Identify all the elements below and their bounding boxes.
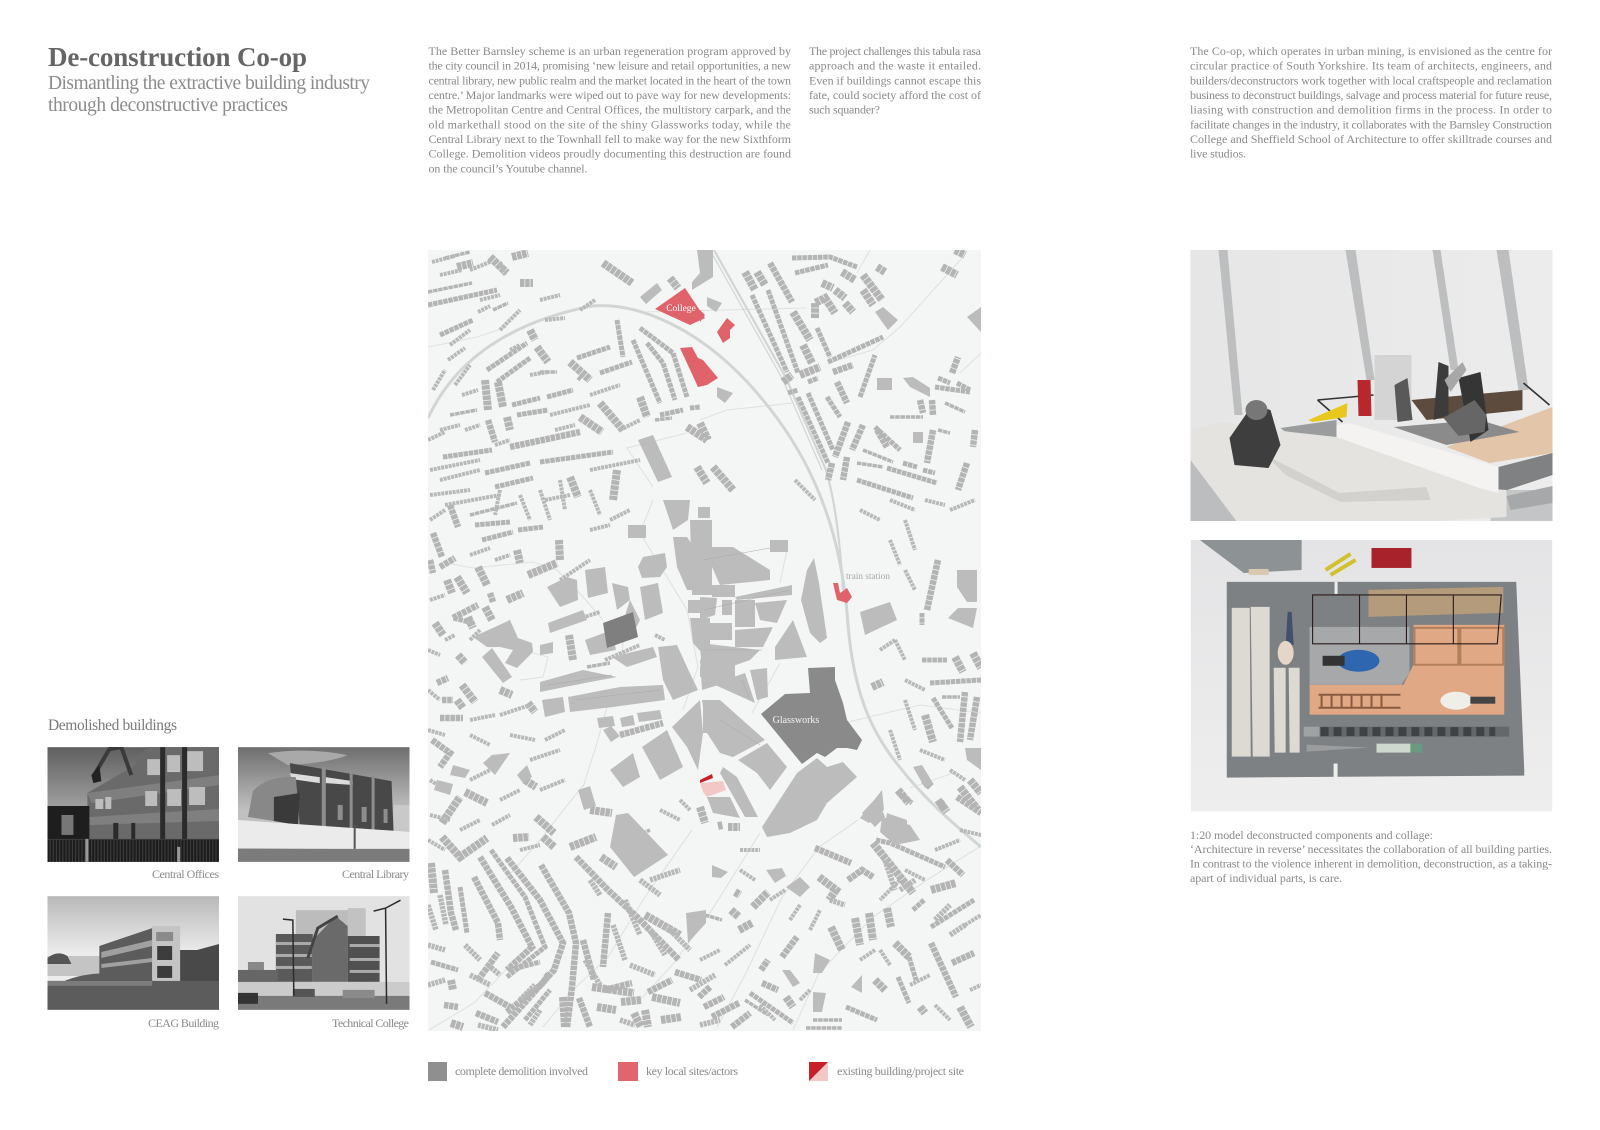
caption: model description: apart of individual parts, is care. bbox=[1190, 871, 1342, 885]
caption: model description: ‘Architecture in reverse’ necessitates the collaboration of all building parties. bbox=[1190, 842, 1552, 856]
text block: Better Barnsley scheme: old markethall stood on the site of the shiny Glassworks today, while the bbox=[428, 117, 791, 131]
roads bbox=[428, 250, 981, 1030]
caption: CEAG Building: CEAG Building bbox=[148, 1016, 219, 1030]
text block: project challenge: Even if buildings cannot escape this bbox=[809, 73, 981, 87]
photo: model top view bbox=[1190, 540, 1552, 812]
photo: CEAG Building bbox=[48, 896, 219, 1010]
map highlight: Glassworks bbox=[761, 667, 862, 764]
text block: the Co-op: The Co-op, which operates in urban mining, is envisioned as the centre for bbox=[1190, 44, 1552, 58]
building footprints bbox=[434, 250, 981, 1012]
subtitle: Dismantling the extractive building industry bbox=[48, 73, 370, 94]
text block: Better Barnsley scheme: The Better Barnsley scheme is an urban regeneration program approved by bbox=[428, 44, 791, 58]
map highlight: College bbox=[655, 288, 705, 325]
legend item: project site: existing building/project site bbox=[837, 1064, 964, 1078]
panel: demolished buildings bbox=[48, 717, 410, 1030]
text block: project challenge: The project challenges this tabula rasa bbox=[809, 44, 982, 58]
map highlight: Glassworks: Glassworks bbox=[773, 715, 819, 726]
photo: Central Library bbox=[238, 747, 410, 862]
photo: Technical College bbox=[238, 896, 410, 1010]
caption: model description: 1:20 model deconstructed components and collage: bbox=[1190, 828, 1433, 842]
title block bbox=[48, 42, 370, 116]
railway lines bbox=[428, 250, 981, 847]
hatch texture bbox=[548, 548, 790, 745]
text block: Better Barnsley scheme: on the council’s Youtube channel. bbox=[428, 161, 588, 175]
map highlight: dark demolished site bbox=[603, 612, 638, 648]
terraced rows and small buildings bbox=[428, 250, 981, 1030]
text block: the Co-op: circular practice of South Yorkshire. Its team of architects, engineers, and bbox=[1190, 59, 1552, 73]
photo: Central Offices bbox=[48, 747, 219, 862]
caption: Central Offices: Central Offices bbox=[152, 867, 219, 881]
text block: the Co-op: facilitate changes in the industry, it collaborates with the Barnsley Construction bbox=[1190, 117, 1552, 131]
text block: Better Barnsley scheme: central library, new public realm and the market located in the heart of the town bbox=[428, 73, 791, 87]
legend item: complete demolition bbox=[428, 1062, 588, 1081]
text block: the Co-op: liasing with construction and demolition firms in the process. In order to bbox=[1190, 103, 1552, 117]
legend bbox=[428, 1062, 964, 1081]
text block: Better Barnsley scheme: College. Demolition videos proudly documenting this destruction are found bbox=[428, 147, 791, 161]
text block: the Co-op: business to deconstruct buildings, salvage and process material for future reuse, bbox=[1190, 88, 1552, 102]
text block: project challenge: approach and the waste it entailed. bbox=[809, 59, 981, 73]
map highlight: College: College bbox=[666, 304, 696, 314]
map highlight: project site bbox=[700, 774, 726, 797]
text block: project challenge bbox=[809, 44, 982, 117]
text block: Better Barnsley scheme: Central Library next to the Townhall fell to make way for the new Sixthform bbox=[428, 132, 792, 146]
text block: the Co-op: builders/deconstructors work together with local craftspeople and reclamation bbox=[1190, 73, 1552, 87]
title: De-construction Co-op bbox=[48, 42, 307, 72]
text block: Better Barnsley scheme: the Metropolitan Centre and Central Offices, the multistory carpark, and the bbox=[428, 103, 791, 117]
legend item: key local sites: key local sites/actors bbox=[646, 1064, 738, 1078]
text block: Better Barnsley scheme: centre.’ Major landmarks were wiped out to pave way for new developments: bbox=[428, 88, 791, 102]
legend item: complete demolition: complete demolition involved bbox=[455, 1064, 588, 1078]
map of Barnsley bbox=[428, 250, 981, 1031]
caption: Central Library: Central Library bbox=[342, 867, 409, 881]
heading: demolished buildings: Demolished buildings bbox=[48, 717, 177, 734]
map highlight: key local sites bbox=[680, 310, 735, 387]
text block: project challenge: such squander? bbox=[809, 103, 880, 117]
subtitle: through deconstructive practices bbox=[48, 95, 288, 116]
text block: Better Barnsley scheme: the city council in 2014, promising ‘new leisure and retail opportunities, a new bbox=[428, 59, 791, 73]
map highlight: train station: train station bbox=[846, 572, 890, 582]
subtitle bbox=[48, 73, 370, 116]
caption: model description: In contrast to the violence inherent in demolition, deconstruction, as a taking- bbox=[1190, 856, 1552, 870]
text block: Better Barnsley scheme bbox=[428, 44, 792, 175]
photo: model collage perspective bbox=[1190, 250, 1552, 521]
text block: the Co-op: College and Sheffield School of Architecture to offer skilltrade courses and bbox=[1190, 132, 1552, 146]
caption: Technical College: Technical College bbox=[332, 1016, 409, 1030]
legend item: project site bbox=[809, 1062, 964, 1081]
legend item: key local sites bbox=[618, 1062, 738, 1081]
text block: the Co-op: live studios. bbox=[1190, 147, 1246, 161]
text block: the Co-op bbox=[1190, 44, 1552, 161]
caption: model description bbox=[1190, 828, 1552, 885]
text block: project challenge: fate, could society afford the cost of bbox=[809, 88, 981, 102]
map highlight: train station bbox=[833, 572, 890, 603]
